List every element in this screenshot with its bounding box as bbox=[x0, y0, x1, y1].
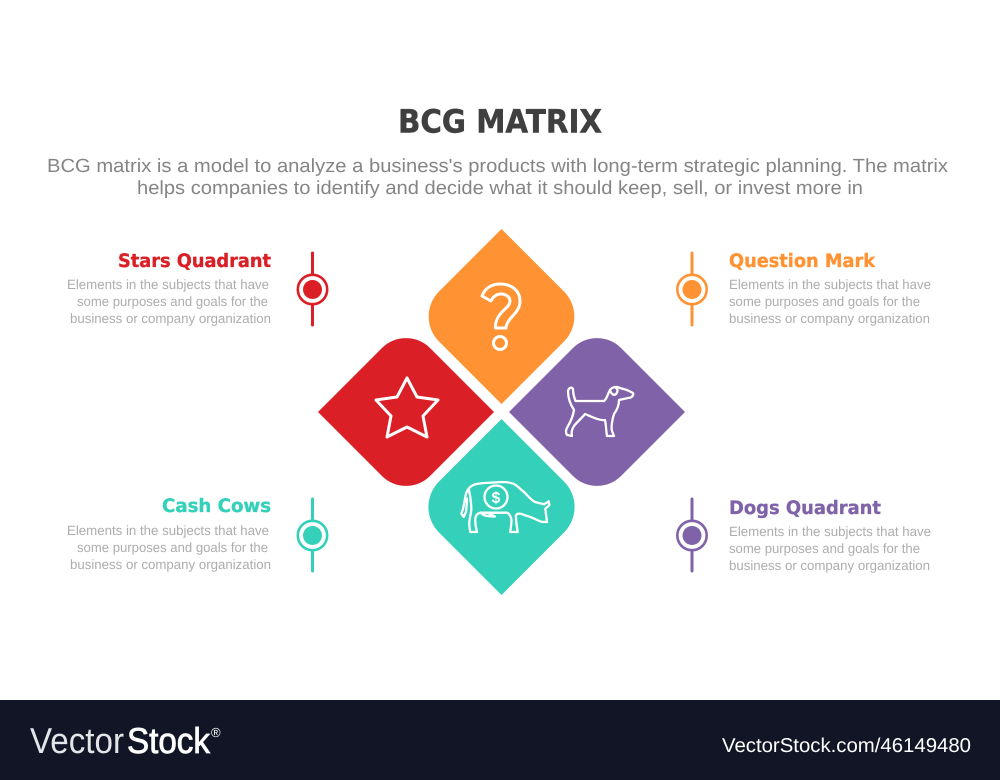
heading: question mark: Question Mark bbox=[729, 251, 876, 272]
description: stars quadrant bbox=[67, 277, 271, 326]
description: question mark: some purposes and goals for the bbox=[729, 294, 920, 309]
description: stars quadrant: Elements in the subjects that have bbox=[67, 277, 269, 292]
heading: stars quadrant: Stars Quadrant bbox=[118, 251, 271, 272]
marker: dogs bbox=[677, 499, 707, 571]
description: dogs quadrant: business or company organization bbox=[729, 558, 930, 573]
icon: cow with dollar coin bbox=[461, 482, 549, 532]
icon: question mark bbox=[482, 284, 520, 350]
panel: question mark diamond bbox=[429, 229, 574, 404]
description: cash cows: Elements in the subjects that have bbox=[67, 523, 269, 538]
description: question mark: business or company organization bbox=[729, 311, 930, 326]
subtitle text: helps companies to identify and decide what it should keep, sell, or invest more in bbox=[137, 178, 863, 199]
description: cash cows: business or company organization bbox=[70, 557, 271, 572]
callout: question mark bbox=[677, 251, 931, 326]
image id: VectorStock.com/46149480 bbox=[722, 735, 971, 757]
heading: cash cows: Cash Cows bbox=[162, 496, 271, 517]
description: dogs quadrant: Elements in the subjects that have bbox=[729, 524, 931, 539]
callout: stars quadrant bbox=[67, 251, 327, 326]
description: cash cows bbox=[67, 523, 271, 572]
description: stars quadrant: some purposes and goals for the bbox=[77, 294, 268, 309]
description: dogs quadrant bbox=[729, 524, 931, 573]
panel: cash cows diamond bbox=[428, 419, 575, 595]
VectorStock logo: Vector bbox=[30, 720, 124, 761]
description: stars quadrant: business or company organization bbox=[70, 311, 271, 326]
marker: question mark bbox=[677, 253, 707, 325]
subtitle text: BCG matrix is a model to analyze a business's products with long-term strategic planning. The matrix bbox=[47, 156, 949, 177]
callout: dogs quadrant bbox=[677, 498, 931, 573]
VectorStock logo bbox=[30, 720, 221, 761]
VectorStock logo: Stock bbox=[127, 720, 211, 761]
icon: dog bbox=[566, 387, 633, 436]
subtitle text bbox=[47, 156, 949, 199]
description: question mark: Elements in the subjects that have bbox=[729, 277, 931, 292]
dollar sign: $ bbox=[492, 490, 501, 507]
description: cash cows: some purposes and goals for the bbox=[77, 540, 268, 555]
callout: cash cows bbox=[67, 496, 327, 572]
description: dogs quadrant: some purposes and goals for the bbox=[729, 541, 920, 556]
title: BCG MATRIX bbox=[398, 102, 602, 140]
description: question mark bbox=[729, 277, 931, 326]
marker: stars bbox=[298, 253, 327, 325]
icon: star bbox=[376, 378, 438, 437]
panel: stars diamond bbox=[318, 338, 494, 486]
panel: dogs diamond bbox=[509, 338, 685, 486]
VectorStock logo: ® bbox=[211, 725, 221, 740]
heading: dogs quadrant: Dogs Quadrant bbox=[729, 498, 881, 519]
footer bar bbox=[0, 700, 1000, 780]
marker: cash cows bbox=[298, 499, 327, 571]
